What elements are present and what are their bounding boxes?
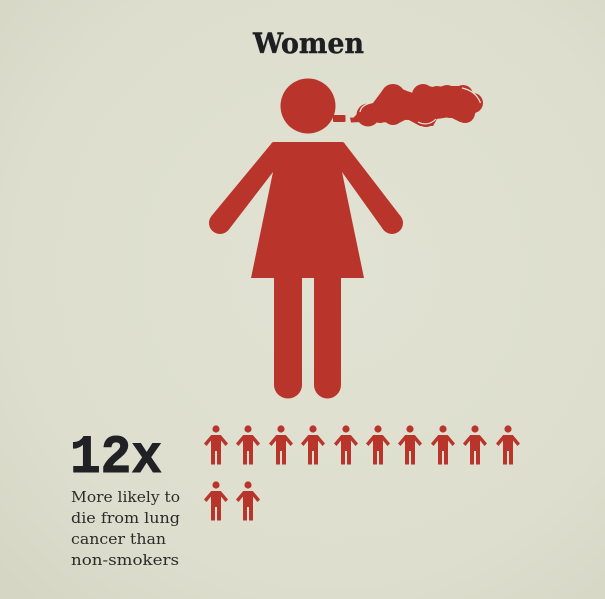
- smoke cloud: [350, 84, 483, 127]
- title: Women: [252, 27, 364, 60]
- cigarette: [333, 115, 346, 122]
- left hand: [209, 212, 231, 234]
- body: [212, 142, 401, 398]
- icon: smoking woman: [209, 78, 403, 398]
- right hand: [381, 212, 403, 234]
- description text: die from lung: [71, 511, 180, 527]
- statistic: 12x: 12x: [70, 428, 162, 489]
- description text: cancer than: [71, 532, 166, 548]
- head: [280, 78, 336, 134]
- description text: non-smokers: [71, 553, 179, 569]
- description text: More likely to: [71, 490, 180, 506]
- icon row: twelve small figures: [204, 425, 520, 520]
- description text: [71, 490, 180, 569]
